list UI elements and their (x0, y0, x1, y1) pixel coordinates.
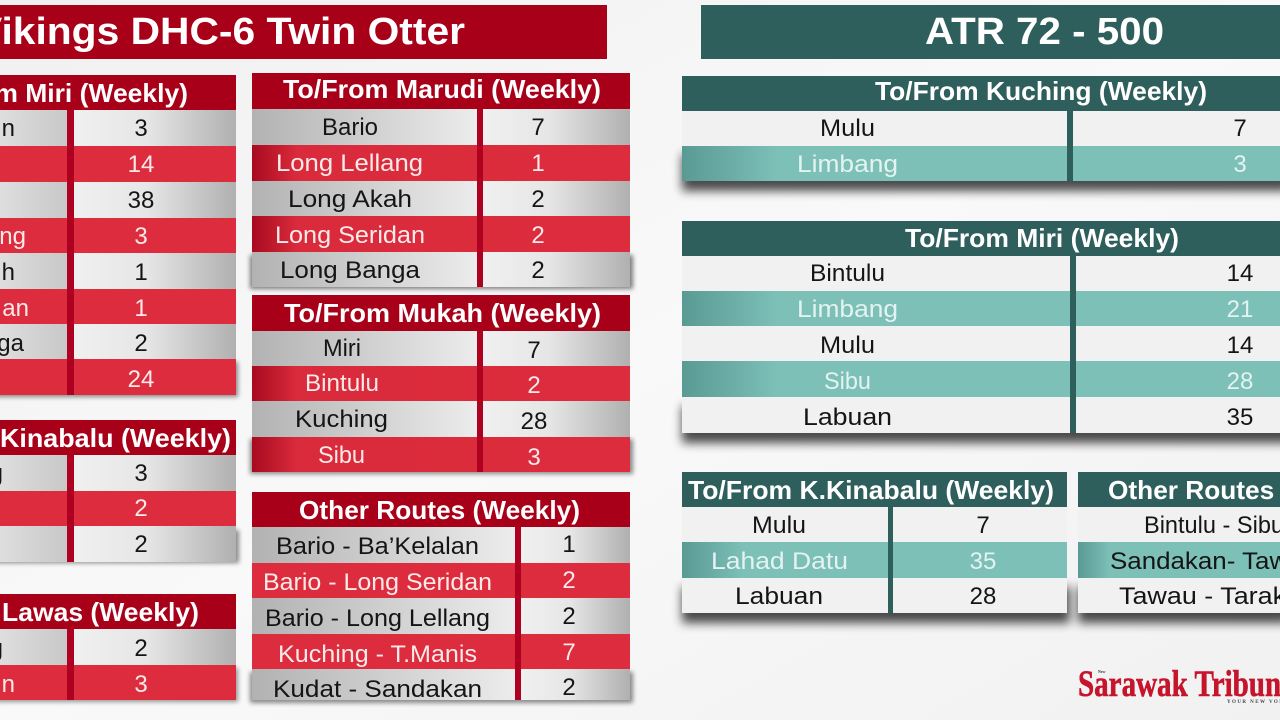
title: ATR 72-500 (701, 5, 1280, 59)
panel: other routes, Twin Otter: Kudat - Sandakan (273, 676, 482, 703)
panel: to/from Miri, Twin Otter: 38 (128, 187, 154, 214)
panel: to/from Miri, Twin Otter: 2 (134, 330, 148, 357)
panel: to/from Marudi: 1 (531, 150, 545, 177)
panel: to/from K.Kinabalu, ATR: To/From K.Kinabalu (Weekly) (688, 475, 1054, 505)
panel: to/from Miri, ATR: 14 (1227, 332, 1253, 359)
panel: other routes, Twin Otter: Other Routes (Weekly) (299, 495, 580, 525)
panel: to/from Mukah: Miri (323, 335, 361, 362)
panel: to/from Miri, ATR: 21 (1227, 296, 1253, 323)
panel: other routes, Twin Otter: Bario - Long Lellang (265, 605, 490, 632)
panel: to/from Miri, ATR: Limbang (797, 296, 898, 323)
panel: to/from Mukah: Sibu (318, 442, 365, 469)
panel: to/from Miri, ATR: To/From Miri (Weekly) (905, 223, 1179, 253)
panel: to/from Mukah: Bintulu (305, 370, 379, 397)
panel: to/from Mukah: To/From Mukah (Weekly) (284, 298, 601, 328)
panel: other routes, Twin Otter: 2 (562, 567, 576, 594)
panel: to/from K.Kinabalu, ATR: Mulu (752, 512, 806, 539)
panel: to/from Lawas, Twin Otter: 3 (134, 671, 148, 698)
panel: other routes, Twin Otter: 2 (562, 674, 576, 701)
panel: to/from Kuching, ATR: 3 (1233, 151, 1247, 178)
panel: other routes, ATR (1078, 472, 1280, 623)
title: ATR 72-500: ATR 72 - 500 (925, 11, 1164, 53)
panel: other routes, Twin Otter (250, 492, 633, 703)
panel: to/from Marudi: Long Seridan (275, 222, 425, 249)
panel: to/from Kinabalu, Twin Otter: 2 (134, 495, 148, 522)
panel: to/from Miri, ATR: 14 (1227, 260, 1253, 287)
panel: other routes, Twin Otter: Bario - Long Seridan (263, 569, 492, 596)
panel: to/from Miri, Twin Otter: h (2, 259, 15, 286)
panel: other routes, Twin Otter: 2 (562, 603, 576, 630)
panel: other routes, Twin Otter: 1 (562, 531, 576, 558)
panel: to/from Marudi: Long Akah (288, 186, 412, 213)
panel: to/from Mukah: 3 (527, 444, 541, 471)
panel: to/from Marudi: Long Banga (280, 257, 421, 284)
panel: to/from Miri, Twin Otter: ng (0, 223, 26, 250)
panel: to/from Kinabalu, Twin Otter: Kinabalu (Weekly) (0, 423, 231, 453)
panel: to/from Lawas, Twin Otter: 2 (134, 635, 148, 662)
panel: to/from Marudi (250, 73, 633, 289)
panel: to/from Marudi: 7 (531, 114, 545, 141)
panel: to/from K.Kinabalu, ATR: 7 (976, 512, 990, 539)
panel: to/from Mukah (250, 295, 633, 474)
panel: to/from Miri, Twin Otter: 3 (134, 223, 148, 250)
logo: Sarawak Tribune: New (1098, 669, 1106, 674)
panel: to/from K.Kinabalu, ATR: 35 (970, 548, 996, 575)
panel: to/from Lawas, Twin Otter: n (2, 671, 15, 698)
panel: to/from Mukah: Kuching (295, 406, 388, 433)
panel: to/from Lawas, Twin Otter (0, 594, 238, 702)
panel: to/from Miri, ATR (682, 221, 1280, 443)
panel: to/from Marudi: Bario (322, 114, 378, 141)
panel: to/from Miri, ATR: Bintulu (810, 260, 885, 287)
panel: to/from Mukah: 2 (527, 372, 541, 399)
panel: to/from Kuching, ATR: Mulu (820, 115, 875, 142)
title: Twin Otter (0, 5, 607, 59)
panel: to/from Kinabalu, Twin Otter: 2 (134, 531, 148, 558)
panel: to/from Kinabalu, Twin Otter: 3 (134, 460, 148, 487)
panel: to/from K.Kinabalu, ATR: Labuan (735, 583, 823, 610)
panel: to/from Mukah: 28 (521, 408, 547, 435)
panel: to/from Kuching, ATR: To/From Kuching (Weekly) (875, 76, 1207, 106)
panel: to/from Miri, Twin Otter: n (2, 115, 15, 142)
panel: to/from Marudi: To/From Marudi (Weekly) (283, 74, 601, 104)
panel: to/from Kuching, ATR: 7 (1233, 115, 1247, 142)
panel: to/from Miri, Twin Otter: 24 (128, 366, 154, 393)
panel: to/from Kinabalu, Twin Otter (0, 420, 239, 563)
panel: to/from Miri, Twin Otter: 1 (134, 259, 148, 286)
panel: to/from Miri, ATR: 35 (1227, 404, 1253, 431)
panel: to/from Miri, ATR: 28 (1227, 368, 1253, 395)
panel: other routes, Twin Otter: 7 (562, 639, 576, 666)
panel: to/from Lawas, Twin Otter: Lawas (Weekly) (2, 597, 199, 627)
panel: to/from K.Kinabalu, ATR: 28 (970, 583, 996, 610)
panel: to/from K.Kinabalu, ATR (682, 472, 1070, 623)
panel: to/from Miri, Twin Otter (0, 75, 238, 397)
panel: to/from Kuching, ATR (682, 76, 1280, 191)
panel: to/from Marudi: Long Lellang (276, 150, 423, 177)
panel: to/from K.Kinabalu, ATR: Lahad Datu (711, 548, 848, 575)
panel: to/from Miri, Twin Otter: 1 (134, 295, 148, 322)
panel: other routes, Twin Otter: Bario - Ba’Kelalan (276, 533, 479, 560)
panel: to/from Marudi: 2 (531, 257, 545, 284)
panel: to/from Kuching, ATR: Limbang (797, 151, 898, 178)
panel: to/from Marudi: 2 (531, 186, 545, 213)
panel: to/from Miri, Twin Otter: 3 (134, 115, 148, 142)
panel: to/from Miri, Twin Otter: an (2, 295, 29, 322)
panel: to/from Miri, Twin Otter: 14 (128, 151, 154, 178)
panel: to/from Miri, ATR: Labuan (803, 404, 892, 431)
panel: to/from Miri, ATR: Sibu (824, 368, 871, 395)
panel: to/from Miri, ATR: Mulu (820, 332, 875, 359)
panel: other routes, Twin Otter: Kuching - T.Manis (278, 641, 477, 668)
panel: to/from Mukah: 7 (527, 337, 541, 364)
panel: to/from Marudi: 2 (531, 222, 545, 249)
